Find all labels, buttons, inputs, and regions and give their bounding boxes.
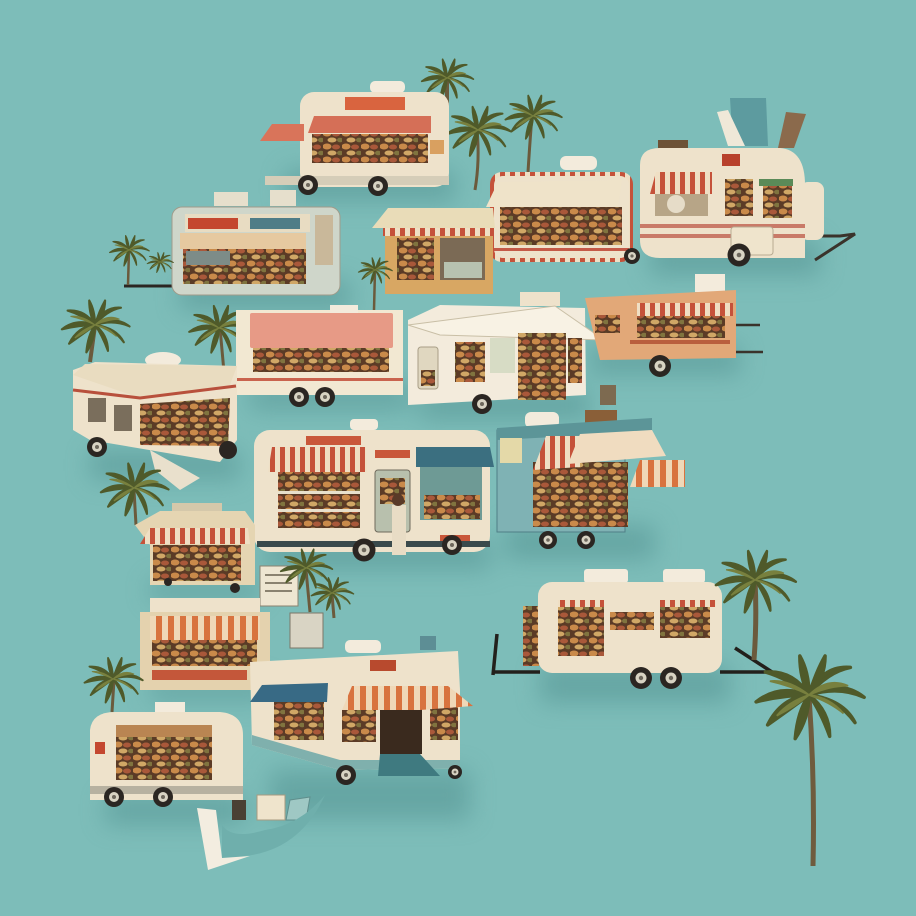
trailer 12: small stall: [135, 503, 255, 593]
trailer 11: teal stall: [497, 410, 685, 549]
palm: right medium: [716, 551, 796, 660]
palm: top group: [422, 59, 562, 190]
folded paper tail: [197, 795, 325, 870]
palm: left of trailer 5: [110, 236, 173, 285]
trailer 7: white with food display: [408, 292, 616, 414]
trailer 8: orange with hitch: [585, 274, 763, 377]
palm: below trailer 9: [101, 464, 169, 525]
trailer 1: top centre: [260, 81, 449, 196]
palm: between 4 and 6: [358, 258, 392, 310]
folding chairs: [232, 795, 310, 820]
trailer 15: bottom left: [90, 702, 243, 807]
trailer 3: striped top centre: [486, 156, 640, 264]
trailer 4: small yellow truck: [372, 208, 495, 294]
trailer 16: right with A-frame hitch: [493, 569, 772, 689]
palm: left pair: [62, 301, 250, 372]
drop shadows: [90, 170, 820, 825]
palm pair: centre: [281, 549, 354, 648]
trailer 14: lower centre with orange awning: [250, 636, 473, 785]
trailer 6: pink awning: [236, 305, 403, 407]
trailer 2: top right with rear hitch: [640, 98, 855, 266]
trailer 5: grey-teal left: [124, 190, 340, 295]
sign board: [260, 566, 298, 606]
trailer 10: large centre: [254, 419, 494, 562]
palm: right tall: [756, 656, 864, 866]
palm: lower left: [84, 658, 143, 712]
trailer 9: cream left: [73, 352, 237, 490]
trailer 13: lower left stall: [140, 598, 270, 690]
